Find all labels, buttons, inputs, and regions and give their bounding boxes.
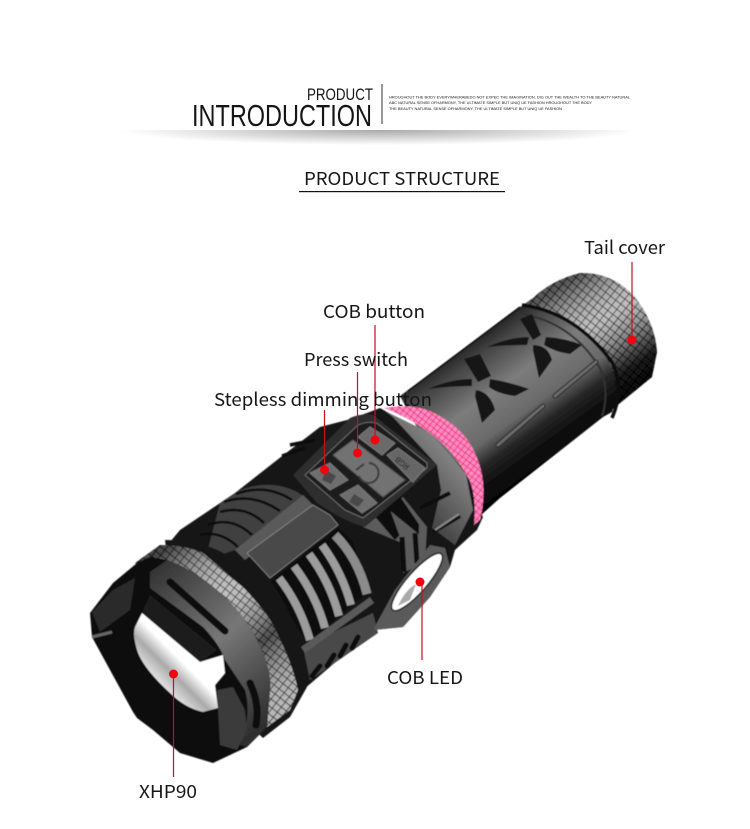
callout: press switch: Press switch bbox=[304, 346, 408, 372]
callout: XHP90: XHP90 bbox=[139, 778, 197, 804]
callout: press switch bbox=[304, 346, 408, 458]
callout: COB LED: COB LED bbox=[387, 664, 463, 690]
pink knurled ring bbox=[384, 406, 484, 525]
callout: stepless dimming button bbox=[214, 386, 432, 474]
callout: XHP90 bbox=[139, 670, 197, 804]
head knurled ring bbox=[135, 545, 298, 730]
header title: product introduction bbox=[192, 85, 373, 133]
body silhouette bbox=[170, 408, 483, 735]
section heading: product structure: PRODUCT STRUCTURE bbox=[304, 165, 500, 191]
lower strip with grooves bbox=[303, 600, 378, 680]
header small description text bbox=[389, 94, 631, 111]
bezel slots bbox=[170, 582, 257, 725]
header title: product introduction: INTRODUCTION bbox=[192, 98, 372, 133]
lens hood bbox=[142, 595, 217, 662]
header small description text: ABC NATURAL SENSE OFHARMONY, THE ULTIMATE SIMPLE BUT UNIQ UE FASHION HROUGHOUT THE BODY bbox=[389, 100, 592, 105]
top fins bbox=[200, 485, 305, 560]
button: power press switch bbox=[333, 440, 405, 497]
tail cap knurled bbox=[520, 273, 657, 417]
head dark ring bbox=[165, 540, 307, 738]
top vents bbox=[282, 440, 315, 456]
cooling ribs bbox=[270, 528, 370, 643]
header shadow band bbox=[100, 115, 660, 145]
COB LED bbox=[373, 545, 450, 630]
header vertical divider bbox=[382, 84, 383, 124]
front bezel bbox=[90, 557, 270, 763]
callout: stepless dimming button: Stepless dimming button bbox=[214, 386, 432, 412]
side vent block bbox=[363, 497, 427, 573]
tube body bbox=[400, 305, 618, 525]
header small description text: HROUGHOUT THE BODY EVERYWHERABEDO NOT EXPEC THE IMAGINATION, DIG OUT THE WEALTH TO THE BEAUTY NATURAL bbox=[389, 94, 631, 100]
button: COB bbox=[358, 427, 395, 455]
collar bbox=[385, 411, 473, 545]
left lobes bbox=[92, 578, 135, 632]
bezel rim bbox=[150, 560, 270, 747]
header title: product introduction: PRODUCT bbox=[307, 85, 373, 104]
callout: tail cover: Tail cover bbox=[584, 234, 666, 260]
right tab bbox=[217, 687, 247, 750]
panel strips bbox=[235, 495, 338, 578]
callout: COB button bbox=[323, 298, 425, 444]
callout: COB LED bbox=[387, 578, 463, 690]
button: RGB bbox=[387, 448, 425, 482]
tube slots bbox=[498, 362, 596, 445]
button: stepless dimming up bbox=[310, 463, 348, 490]
button: stepless dimming down bbox=[340, 485, 377, 513]
lens bbox=[134, 613, 225, 712]
button plate bbox=[293, 414, 437, 527]
callout: COB button: COB button bbox=[323, 298, 425, 324]
header small description text: THE BEAUTY NATURAL SENSE OFHARMONY, THE ULTIMATE SIMPLE BUT UNIQ UE FASHION bbox=[389, 106, 562, 111]
flashlight illustration bbox=[90, 273, 657, 763]
tube cut-outs bbox=[428, 314, 582, 423]
callout: tail cover bbox=[584, 234, 666, 344]
button: RGB: RGB bbox=[393, 454, 412, 472]
